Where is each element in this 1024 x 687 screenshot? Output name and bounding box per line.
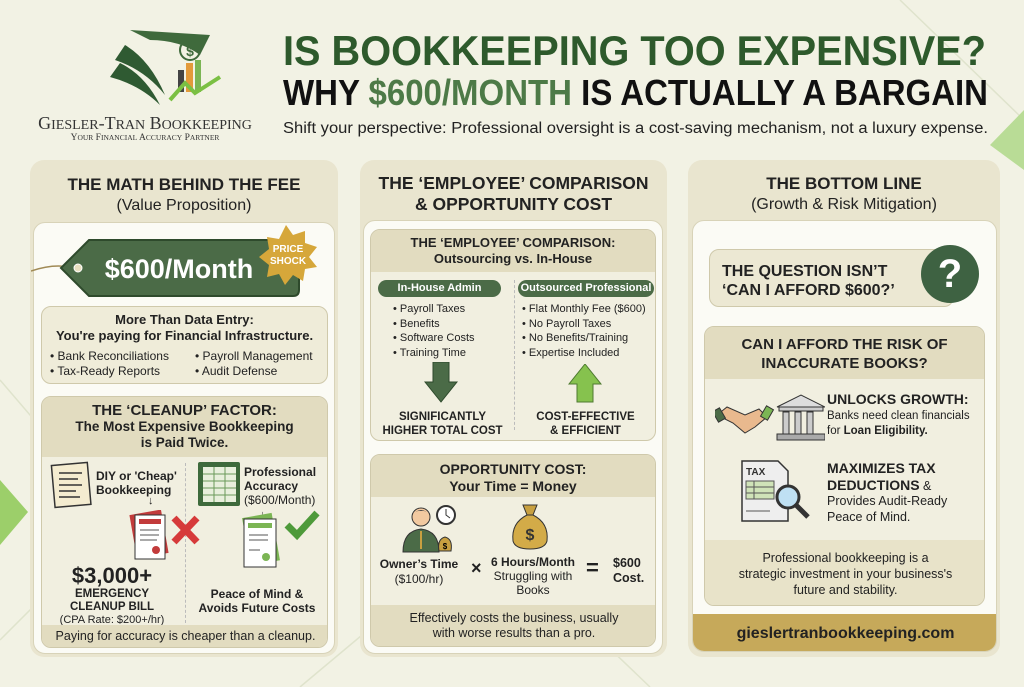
icon: money bag <box>512 504 548 550</box>
text block: more than data entry: Audit Defense <box>202 364 277 378</box>
panel: risk: MAXIMIZES TAX <box>827 460 936 476</box>
column: in-house: HIGHER TOTAL COST <box>382 425 503 437</box>
column: in-house: Benefits <box>400 318 440 330</box>
heading <box>378 173 648 214</box>
panel: opportunity cost: 6 Hours/Month <box>491 555 575 569</box>
callout: opportunity footer: with worse results than a pro. <box>433 626 595 640</box>
column: in-house: In-House Admin <box>398 282 481 294</box>
price tag <box>31 225 317 297</box>
heading: & OPPORTUNITY COST <box>415 194 612 214</box>
heading <box>751 174 937 213</box>
icon: tax doc with magnifier <box>741 460 810 522</box>
icon: question circle: ? <box>938 252 962 296</box>
panel: cleanup factor: The Most Expensive Bookkeeping <box>75 419 294 434</box>
logo: GIESLER-TRAN BOOKKEEPING <box>38 113 252 133</box>
panel: risk: Banks need clean financials <box>827 410 970 422</box>
column: outsourced: Expertise Included <box>529 346 619 358</box>
panel: opportunity cost: OPPORTUNITY COST: <box>440 461 586 477</box>
callout: bottom line footer <box>705 540 986 607</box>
price tag: $600/Month <box>105 254 253 284</box>
panel: risk: for Loan Eligibility. <box>827 425 928 437</box>
icon: messy papers <box>50 462 92 508</box>
panel: risk: UNLOCKS GROWTH: <box>827 391 969 407</box>
panel: cleanup factor: ($600/Month) <box>244 493 315 507</box>
panel: opportunity cost: $600 <box>613 556 641 570</box>
website footer <box>693 614 998 653</box>
website footer: gieslertranbookkeeping.com <box>737 625 954 642</box>
panel: cleanup factor: $3,000+ <box>72 563 152 588</box>
panel: cleanup factor: Professional <box>244 465 316 479</box>
panel: opportunity cost: Your Time = Money <box>449 478 577 494</box>
callout: cleanup footer <box>42 625 329 649</box>
panel: opportunity cost: Owner’s Time <box>380 557 458 571</box>
icon: owner with clock <box>402 505 456 552</box>
panel: opportunity cost: Struggling with <box>494 569 572 583</box>
heading: THE MATH BEHIND THE FEE <box>68 175 300 194</box>
icon: tax doc with magnifier: TAX <box>746 467 766 478</box>
title: Shift your perspective: Professional oversight is a cost-saving mechanism, not a luxury expense. <box>283 120 988 137</box>
column: outsourced: No Benefits/Training <box>529 332 628 344</box>
panel: outsourcing vs in-house: Outsourcing vs. In-House <box>434 251 592 266</box>
text: YOUR FINANCIAL ACCURACY PARTNER <box>71 133 219 143</box>
heading: (Value Proposition) <box>117 197 251 214</box>
text block: more than data entry: More Than Data Entry: <box>115 312 254 327</box>
price tag: PRICE <box>273 244 304 255</box>
text block: more than data entry: You're paying for Financial Infrastructure. <box>56 328 313 343</box>
callout: question bubble: ‘CAN I AFFORD $600?’ <box>722 282 895 299</box>
panel: cleanup factor: DIY or 'Cheap' <box>96 469 177 483</box>
callout: cleanup footer: Paying for accuracy is cheaper than a cleanup. <box>56 629 315 643</box>
icon: up arrow <box>568 364 602 402</box>
icon: down arrow <box>424 362 458 403</box>
callout: bottom line footer: future and stability. <box>794 583 898 597</box>
panel: opportunity cost: Cost. <box>613 571 644 585</box>
heading: (Growth & Risk Mitigation) <box>751 196 937 213</box>
icon: owner with clock: $ <box>443 542 448 551</box>
panel: opportunity cost: ($100/hr) <box>395 572 443 586</box>
price tag: SHOCK <box>270 256 307 267</box>
column: in-house: Payroll Taxes <box>400 303 465 315</box>
text block: more than data entry <box>41 306 328 384</box>
column: outsourced: Flat Monthly Fee ($600) <box>529 303 646 315</box>
text block: more than data entry: Tax-Ready Reports <box>57 364 160 378</box>
callout: opportunity footer <box>371 605 657 648</box>
icon: red bill with X <box>129 510 200 560</box>
panel: cleanup factor: Bookkeeping <box>96 483 171 497</box>
column: outsourced: Outsourced Professional <box>521 282 651 294</box>
column: in-house <box>378 280 503 437</box>
heading <box>68 175 300 214</box>
column: outsourced: COST-EFFECTIVE <box>536 411 635 423</box>
panel: cleanup factor: CLEANUP BILL <box>70 601 154 613</box>
column: outsourced: & EFFICIENT <box>550 425 621 437</box>
panel: opportunity cost: Books <box>516 583 550 597</box>
panel: cleanup factor: Peace of Mind & <box>211 587 303 601</box>
title <box>283 27 988 137</box>
panel: outsourcing vs in-house <box>370 229 656 441</box>
icon: green doc with check <box>242 510 320 568</box>
icon: question circle <box>921 245 979 303</box>
callout: question bubble: THE QUESTION ISN’T <box>722 263 887 280</box>
callout: bottom line footer: strategic investment in your business's <box>739 567 952 581</box>
panel: risk: Peace of Mind. <box>827 510 910 524</box>
logo: $ <box>186 43 194 59</box>
panel: cleanup factor: EMERGENCY <box>75 588 149 600</box>
column: outsourced <box>518 280 654 437</box>
panel: cleanup factor: ↓ <box>148 495 154 507</box>
panel: risk <box>704 326 985 606</box>
panel: opportunity cost: × <box>471 558 482 578</box>
panel: cleanup factor: THE ‘CLEANUP’ FACTOR: <box>92 402 277 419</box>
panel: outsourcing vs in-house: THE ‘EMPLOYEE’ COMPARISON: <box>411 235 615 250</box>
panel: cleanup factor: is Paid Twice. <box>141 435 228 450</box>
logo <box>38 30 252 143</box>
panel: cleanup factor: Avoids Future Costs <box>199 601 315 615</box>
panel: risk: INACCURATE BOOKS? <box>761 355 928 372</box>
panel: math behind the fee <box>30 160 338 657</box>
text block: more than data entry: Bank Reconciliations <box>58 349 169 363</box>
panel: cleanup factor: Accuracy <box>244 479 298 493</box>
text block: more than data entry: Payroll Management <box>203 349 313 363</box>
callout: opportunity footer: Effectively costs the business, usually <box>410 611 618 625</box>
icon: ledger book <box>198 462 240 506</box>
panel: risk: DEDUCTIONS & <box>827 476 931 492</box>
panel: cleanup factor <box>41 396 328 648</box>
panel: opportunity cost: = <box>586 555 599 580</box>
icon: handshake and bank <box>715 394 825 440</box>
panel: risk: CAN I AFFORD THE RISK OF <box>741 336 948 353</box>
panel: employee comparison <box>360 160 667 657</box>
panel: bottom line <box>688 160 1000 657</box>
heading: THE BOTTOM LINE <box>766 174 922 193</box>
callout: bottom line footer: Professional bookkeeping is a <box>762 551 929 565</box>
column: in-house: Training Time <box>400 346 466 358</box>
icon: money bag: $ <box>526 527 535 544</box>
heading: THE ‘EMPLOYEE’ COMPARISON <box>378 173 648 193</box>
column: in-house: Software Costs <box>400 332 475 344</box>
panel: risk: Provides Audit-Ready <box>827 494 947 508</box>
column: in-house: SIGNIFICANTLY <box>399 411 486 423</box>
panel: cleanup factor: ↓ <box>260 509 266 521</box>
column: outsourced: No Payroll Taxes <box>529 318 611 330</box>
panel: opportunity cost <box>370 454 656 647</box>
panel: cleanup factor: (CPA Rate: $200+/hr) <box>60 614 164 626</box>
callout: question bubble <box>709 249 954 307</box>
